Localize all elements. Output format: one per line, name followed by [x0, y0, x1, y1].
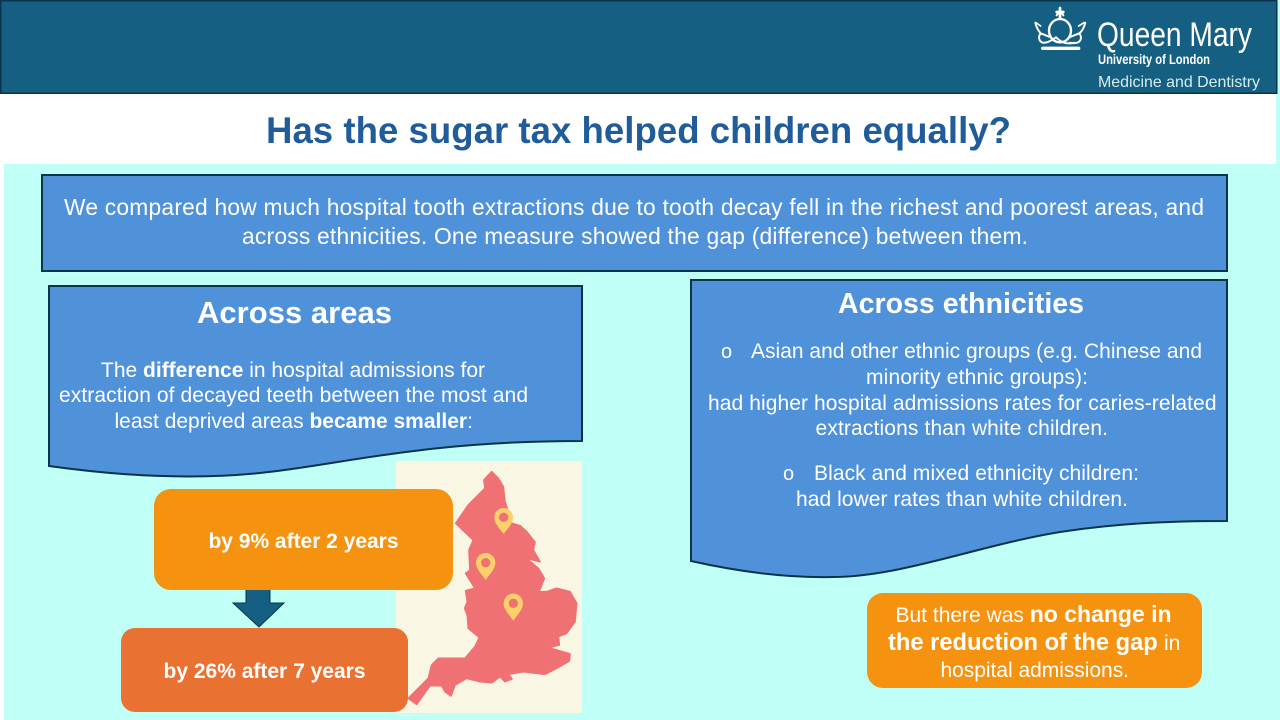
callout: no change in the reduction of the gap: the reduction of the gap [888, 630, 1158, 656]
panel: across ethnicities [691, 280, 1227, 577]
text: asian and other ethnic groups: minority ethnic groups): [866, 366, 1088, 389]
text: difference in admissions: least deprived areas became smaller: [114, 410, 473, 433]
text: asian and other ethnic groups: extractions than white children. [816, 417, 1108, 440]
text: black and mixed ethnicity children: Black and mixed ethnicity children: [814, 462, 1139, 485]
callout: no change in the reduction of the gap: But there was no change in [896, 601, 1172, 627]
text: difference in admissions: The difference in hospital admissions for [101, 359, 485, 382]
text: difference in admissions [59, 359, 528, 433]
panel: across areas [49, 286, 582, 477]
heading: across areas: Across areas [197, 295, 392, 330]
logo: Queen Mary University of London [1035, 8, 1260, 91]
text: asian and other ethnic groups: o [721, 341, 732, 363]
header banner [1, 1, 1277, 93]
callout: by 9% after 2 years: by 9% after 2 years [208, 530, 398, 553]
text: asian and other ethnic groups [708, 340, 1216, 440]
callout: no change in the reduction of the gap [867, 593, 1202, 688]
panel: introduction [42, 175, 1227, 271]
title: Has the sugar tax helped children equally? [266, 110, 1011, 151]
panel: introduction: across ethnicities. One measure showed the gap (difference) between them. [242, 223, 1028, 249]
panel: introduction: We compared how much hospital tooth extractions due to tooth decay fell in the richest and poorest areas, and [64, 194, 1204, 220]
text: difference in admissions: extraction of decayed teeth between the most and [59, 384, 528, 407]
text: black and mixed ethnicity children: o [783, 463, 794, 485]
callout: no change in the reduction of the gap: hospital admissions. [940, 659, 1129, 682]
callout: by 9% after 2 years [154, 489, 453, 590]
map of England with pins [396, 461, 582, 713]
text: asian and other ethnic groups: Asian and other ethnic groups (e.g. Chinese and [751, 340, 1202, 363]
text: black and mixed ethnicity children: had lower rates than white children. [796, 488, 1128, 511]
text: black and mixed ethnicity children [783, 462, 1139, 511]
callout: by 26% after 7 years [121, 628, 408, 712]
heading: across ethnicities: Across ethnicities [838, 288, 1084, 320]
callout: by 26% after 7 years: by 26% after 7 years [164, 660, 366, 683]
callout: no change in the reduction of the gap: in [1164, 632, 1180, 655]
icon: crown [1035, 8, 1085, 48]
logo: Queen Mary University of London: University of London [1098, 51, 1210, 67]
logo: Queen Mary University of London: Queen Mary [1097, 16, 1252, 54]
text: asian and other ethnic groups: had higher hospital admissions rates for caries-related [708, 392, 1216, 415]
logo: Queen Mary University of London: Medicine and Dentistry [1098, 74, 1260, 91]
arrow: down [233, 588, 284, 627]
